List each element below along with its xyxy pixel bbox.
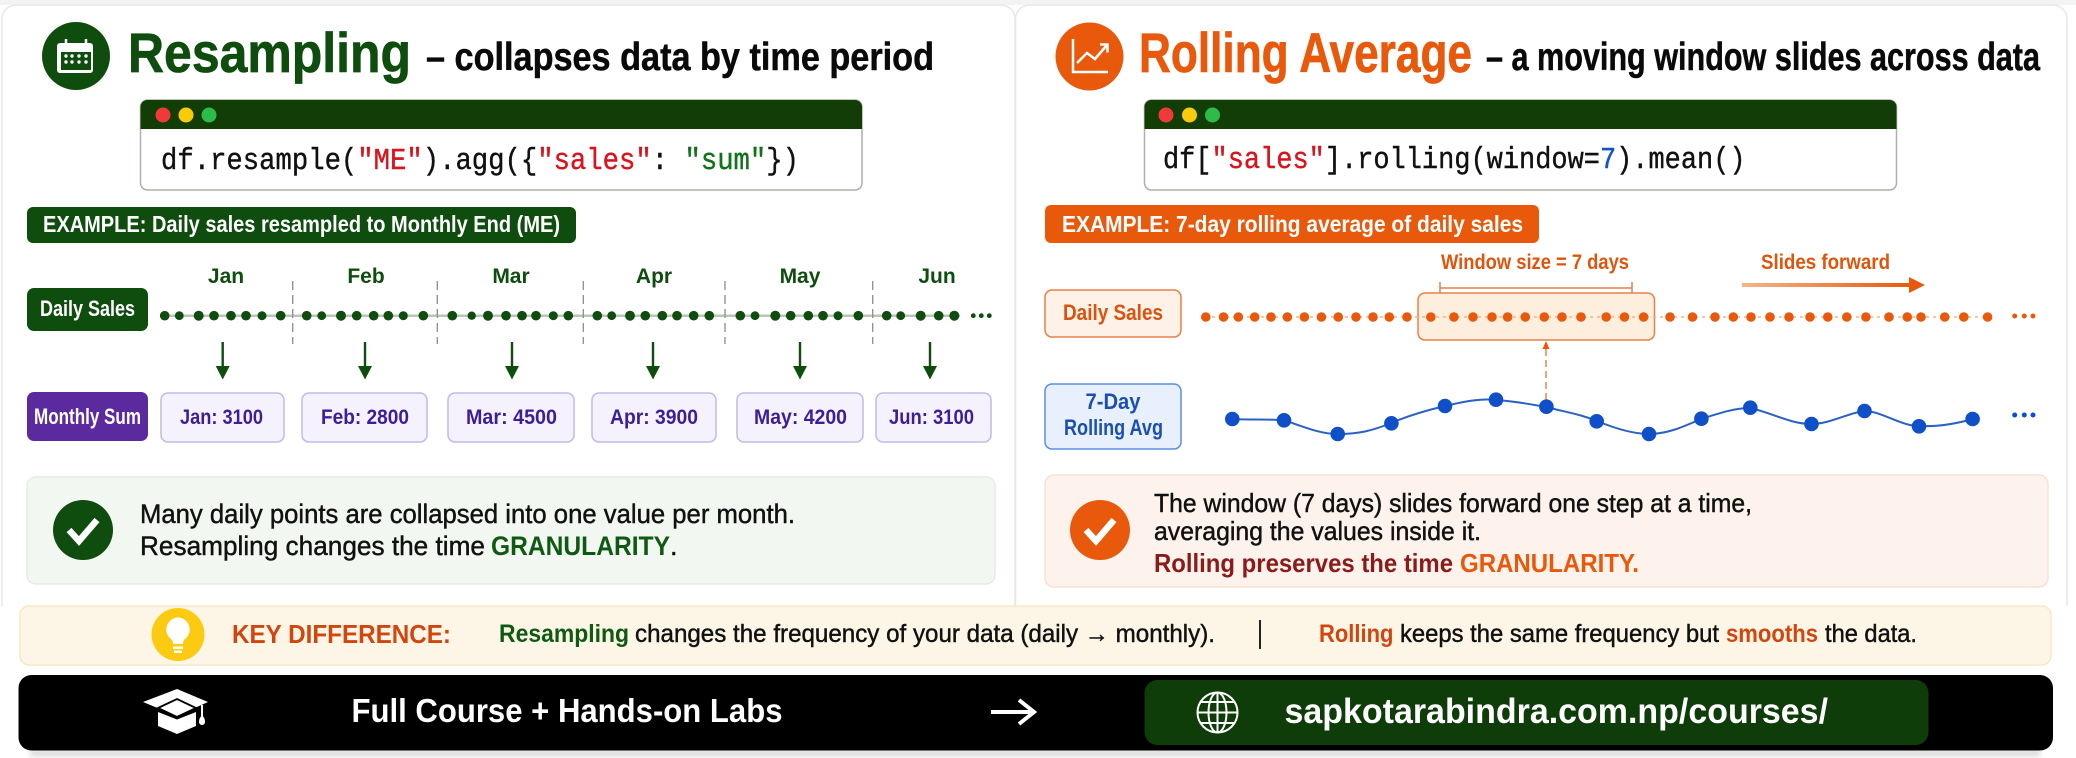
daily sales label: Daily Sales [1063, 300, 1163, 325]
monthly sum label: Monthly Sum [34, 404, 141, 429]
footer bar [18, 675, 2053, 750]
month labels: May [780, 265, 821, 288]
rolling difference: Rolling [1319, 620, 1394, 648]
note text: averaging the values inside it. [1154, 516, 1481, 546]
month labels: Feb [347, 265, 385, 288]
note text: GRANULARITY. [1460, 548, 1639, 578]
rolling line chart [1225, 392, 2036, 441]
note text: Resampling changes the time [140, 531, 485, 561]
arrow right [991, 700, 1034, 724]
example pill [27, 207, 576, 243]
resampling difference: changes the frequency of your data (daily → monthly). [635, 620, 1215, 648]
month labels: Mar [492, 265, 530, 288]
url button [1144, 680, 1928, 745]
monthly sum boxes [161, 393, 991, 442]
note text: Rolling preserves the time [1154, 548, 1453, 578]
key difference heading: KEY DIFFERENCE: [232, 619, 451, 649]
rolling difference [1319, 620, 1917, 648]
dashed arrow up [1542, 341, 1550, 400]
note text: . [670, 531, 678, 561]
example pill: EXAMPLE: 7-day rolling average of daily sales [1062, 211, 1523, 237]
panel: rolling average [1016, 5, 2067, 606]
daily sales label [27, 288, 148, 331]
daily sales label [1045, 290, 1181, 337]
daily dots timeline [160, 281, 992, 344]
month labels: Jun [918, 265, 956, 288]
monthly sum boxes: Jun: 3100 [889, 406, 974, 429]
daily sales label: Daily Sales [40, 296, 135, 321]
url text: sapkotarabindra.com.np/courses/ [1284, 692, 1828, 731]
rolling avg label [1045, 384, 1181, 449]
month labels: Apr [636, 265, 672, 288]
callout: rolling note [1045, 475, 2048, 587]
slides forward arrow: Slides forward [1761, 251, 1890, 274]
panel: resampling [2, 5, 1015, 606]
monthly sum boxes: Feb: 2800 [321, 406, 409, 429]
footer course text: Full Course + Hands-on Labs [352, 692, 782, 729]
daily dots [1201, 312, 2036, 322]
key difference bar [20, 606, 2051, 665]
code window [140, 100, 862, 190]
rolling avg label: 7-Day [1086, 389, 1141, 414]
icon: calendar [42, 22, 110, 90]
window size label [1440, 251, 1632, 294]
icon: light bulb [152, 608, 204, 661]
monthly sum boxes: Jan: 3100 [180, 406, 263, 429]
month labels [208, 265, 956, 288]
note text: GRANULARITY [491, 531, 670, 561]
window size label: Window size = 7 days [1441, 251, 1629, 274]
note text [140, 499, 795, 561]
note text: The window (7 days) slides forward one step at a time, [1154, 488, 1752, 518]
arrows down [216, 342, 937, 380]
monthly sum boxes: Apr: 3900 [610, 406, 698, 429]
slides forward arrow [1742, 251, 1925, 293]
monthly sum boxes: May: 4200 [754, 406, 847, 429]
monthly sum boxes: Mar: 4500 [466, 406, 557, 429]
sliding window box [1418, 293, 1654, 340]
title: Rolling Average: Rolling Average [1139, 21, 1472, 84]
icon: graduation cap [143, 689, 208, 734]
note text: Many daily points are collapsed into one value per month. [140, 499, 795, 529]
rolling difference: the data. [1825, 620, 1917, 648]
monthly sum label [27, 392, 148, 441]
resampling difference: Resampling [499, 620, 629, 648]
icon: globe [1198, 692, 1238, 732]
icon: line chart [1056, 22, 1124, 90]
note text [1154, 488, 1752, 578]
rolling avg label: Rolling Avg [1064, 415, 1163, 440]
title: Resampling: Resampling [128, 21, 411, 84]
code window [1144, 100, 1896, 190]
icon: check [53, 500, 113, 560]
code text: df.resample("ME").agg({"sales": "sum"}) [161, 144, 799, 179]
rolling difference: keeps the same frequency but [1400, 620, 1719, 648]
rolling difference: smooths [1726, 620, 1818, 648]
example pill: EXAMPLE: Daily sales resampled to Monthly End (ME) [43, 211, 560, 237]
example pill [1045, 205, 1539, 243]
callout: resampling note [27, 477, 995, 584]
subtitle: – collapses data by time period [426, 36, 934, 79]
month labels: Jan [208, 265, 244, 288]
code text: df["sales"].rolling(window=7).mean() [1163, 143, 1746, 178]
icon: check [1070, 500, 1130, 560]
